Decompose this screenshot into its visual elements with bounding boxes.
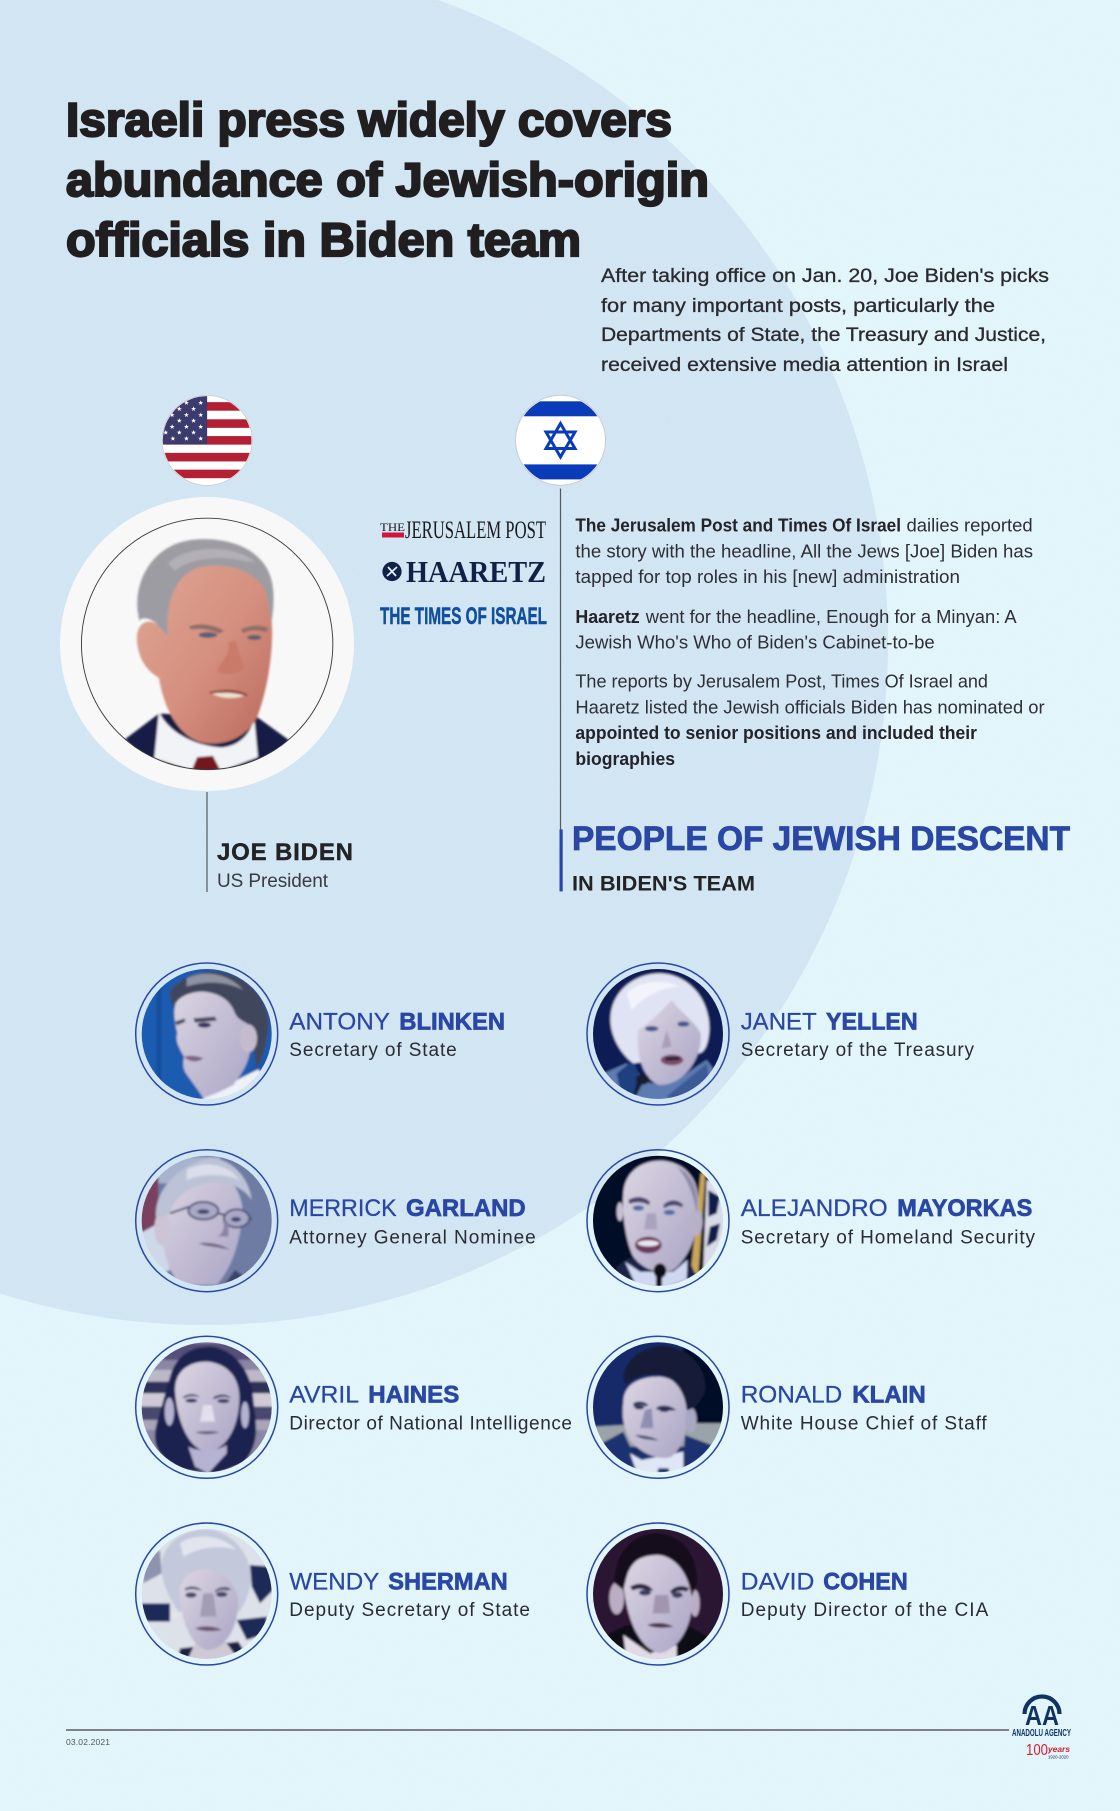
- name: Janet Yellen: JANET: [741, 1008, 817, 1035]
- intro text: Departments of State, the Treasury and Justice,: [601, 324, 1046, 346]
- person: David Cohen: [587, 1523, 989, 1667]
- title: Israeli press widely covers: [66, 93, 672, 146]
- newspaper logo: The Jerusalem Post: [380, 517, 546, 544]
- name: Avril Haines: AVRIL: [289, 1382, 359, 1409]
- person: Antony Blinken: [136, 963, 505, 1107]
- photo: Mayorkas: [593, 1156, 723, 1286]
- title: abundance of Jewish-origin: [66, 153, 709, 206]
- intro text: [601, 265, 1049, 376]
- name: Avril Haines: HAINES: [368, 1382, 459, 1409]
- name: Antony Blinken: [289, 1008, 505, 1061]
- Biden caption: JOE BIDEN: [217, 839, 353, 866]
- name: Merrick Garland: MERRICK: [289, 1195, 397, 1222]
- photo: Blinken: [142, 969, 272, 1099]
- section heading: IN BIDEN'S TEAM: [572, 871, 755, 895]
- news reports text: The Jerusalem Post and Times Of Israel: [575, 516, 901, 536]
- person: Avril Haines: [136, 1336, 572, 1480]
- name: Merrick Garland: Attorney General Nominee: [289, 1227, 536, 1248]
- name: Ronald Klain: KLAIN: [852, 1382, 926, 1409]
- name: David Cohen: DAVID: [741, 1568, 814, 1595]
- newspaper logo: The Jerusalem Post: THE: [380, 520, 405, 534]
- intro text: After taking office on Jan. 20, Joe Biden's picks: [601, 265, 1049, 287]
- newspaper logo: The Times of Israel: THE TIMES OF ISRAEL: [380, 603, 547, 630]
- icon: Israel flag: [510, 395, 610, 485]
- person: Wendy Sherman: [136, 1523, 530, 1667]
- name: Janet Yellen: [741, 1008, 974, 1061]
- name: Merrick Garland: [289, 1195, 536, 1248]
- person: Janet Yellen: [587, 963, 974, 1107]
- photo: Cohen: [593, 1529, 723, 1659]
- person: Ronald Klain: [587, 1336, 987, 1480]
- name: Merrick Garland: GARLAND: [406, 1195, 526, 1222]
- name: Janet Yellen: YELLEN: [826, 1008, 918, 1035]
- name: Janet Yellen: Secretary of the Treasury: [741, 1040, 974, 1061]
- news reports text: went for the headline, Enough for a Minyan: A: [645, 607, 1017, 627]
- logo: Anadolu Agency: 1920-2020: [1048, 1754, 1069, 1760]
- intro text: received extensive media attention in Israel: [601, 354, 1008, 376]
- footer line: [66, 1729, 1009, 1731]
- name: David Cohen: [741, 1568, 989, 1621]
- photo: Yellen: [593, 969, 723, 1099]
- name: Alejandro Mayorkas: [741, 1195, 1036, 1248]
- news reports text: tapped for top roles in his [new] administration: [575, 567, 960, 587]
- name: Avril Haines: Director of National Intelligence: [289, 1413, 572, 1434]
- news reports text: Jewish Who's Who of Biden's Cabinet-to-be: [575, 633, 935, 653]
- background circle: [0, 0, 888, 1325]
- name: Wendy Sherman: SHERMAN: [388, 1568, 508, 1595]
- news reports text: The reports by Jerusalem Post, Times Of Israel and: [575, 672, 988, 692]
- news reports text: [575, 516, 1045, 769]
- news reports text: dailies reported: [906, 516, 1033, 536]
- section heading: PEOPLE OF JEWISH DESCENT: [572, 820, 1070, 858]
- newspaper logo: Haaretz: HAARETZ: [406, 554, 546, 589]
- person: Alejandro Mayorkas: [587, 1150, 1036, 1293]
- title: [66, 93, 709, 266]
- news reports text: biographies: [575, 749, 675, 769]
- name: Ronald Klain: RONALD: [741, 1382, 842, 1409]
- name: David Cohen: COHEN: [823, 1568, 908, 1595]
- name: Ronald Klain: White House Chief of Staff: [741, 1413, 987, 1434]
- photo: Klain: [593, 1342, 723, 1472]
- photo: Garland: [142, 1156, 272, 1286]
- person: Merrick Garland: [136, 1150, 536, 1293]
- logo: Anadolu Agency: years: [1047, 1744, 1070, 1754]
- news reports text: the story with the headline, All the Jews [Joe] Biden has: [575, 541, 1033, 561]
- newspaper logo: The Jerusalem Post: JERUSALEM POST: [405, 517, 546, 544]
- name: Alejandro Mayorkas: MAYORKAS: [897, 1195, 1032, 1222]
- photo: Haines: [142, 1342, 272, 1472]
- name: Antony Blinken: BLINKEN: [399, 1008, 505, 1035]
- photo: Sherman: [142, 1529, 272, 1659]
- connector line: Israel: [560, 488, 562, 830]
- title: officials in Biden team: [66, 213, 581, 266]
- logo: Anadolu Agency: AA: [1025, 1700, 1059, 1731]
- logo: Anadolu Agency: 100: [1026, 1742, 1048, 1759]
- Biden caption: [217, 839, 353, 892]
- Biden caption: US President: [217, 871, 329, 892]
- name: David Cohen: Deputy Director of the CIA: [741, 1600, 989, 1621]
- icon: US flag: [161, 394, 254, 485]
- date: 03.02.2021: [66, 1737, 110, 1747]
- logo: Anadolu Agency: ANADOLU AGENCY: [1012, 1728, 1071, 1739]
- name: Alejandro Mayorkas: Secretary of Homeland Security: [741, 1227, 1036, 1248]
- name: Antony Blinken: ANTONY: [289, 1008, 390, 1035]
- name: Wendy Sherman: Deputy Secretary of State: [289, 1600, 530, 1621]
- name: Wendy Sherman: WENDY: [289, 1568, 379, 1595]
- name: Antony Blinken: Secretary of State: [289, 1040, 457, 1061]
- intro text: for many important posts, particularly the: [601, 295, 995, 317]
- news reports text: Haaretz: [575, 607, 640, 627]
- connector line: Biden: [206, 792, 208, 892]
- logo: Anadolu Agency: [1012, 1696, 1071, 1760]
- name: Ronald Klain: [741, 1382, 987, 1434]
- Joe Biden portrait: [60, 497, 354, 791]
- name: Avril Haines: [289, 1382, 572, 1434]
- news reports text: appointed to senior positions and included their: [575, 723, 977, 743]
- news reports text: Haaretz listed the Jewish officials Biden has nominated or: [575, 697, 1045, 717]
- section heading: [560, 820, 1070, 895]
- name: Wendy Sherman: [289, 1568, 530, 1621]
- name: Alejandro Mayorkas: ALEJANDRO: [741, 1195, 888, 1222]
